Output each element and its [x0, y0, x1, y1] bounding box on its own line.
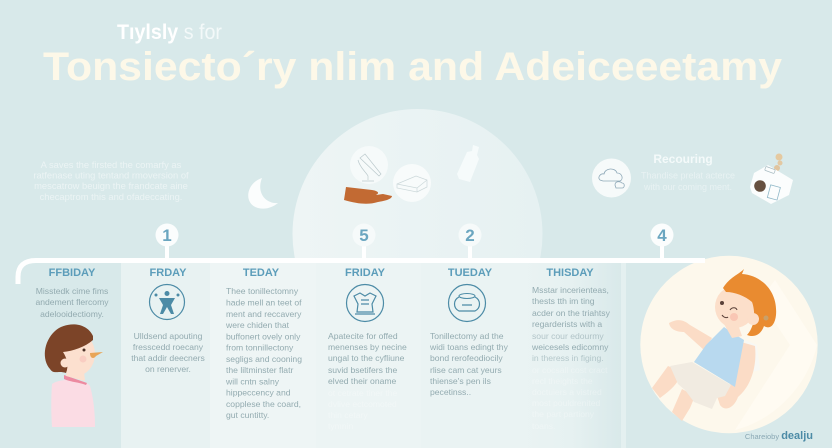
icon: crescent moon — [248, 178, 278, 209]
icon: jar — [448, 284, 486, 322]
panel: column 1: Misstedk cime fims — [36, 286, 108, 296]
panel: column 3: gut cuntitty. — [226, 410, 269, 420]
panel: column 5: TUEDAY — [448, 267, 493, 279]
timeline: marker 4: 4 — [657, 226, 667, 245]
panel: column 6: weicesels edicomny — [531, 342, 609, 352]
panel: column 3: buffonert ovely only — [226, 332, 301, 342]
credit: Chareioby dealju — [745, 430, 813, 442]
panel: column 3: TEDAY — [243, 267, 280, 279]
panel: column 4: Apatecite for offed — [328, 331, 398, 341]
panel: column 4: ot cetrate tiner the — [328, 388, 397, 398]
panel: column 6: most pouldrenited — [532, 398, 601, 408]
icon: throat — [346, 284, 384, 322]
panel: column 1: FFBIDAY — [49, 267, 96, 279]
panel: column 2: that addir deecners — [131, 353, 205, 363]
boy: hair — [723, 269, 776, 336]
panel: column backgrounds — [121, 260, 626, 448]
panel: column 4: menenses by necine — [328, 342, 407, 352]
panel: column 3: Thee tonillectomny — [226, 286, 299, 296]
panel: column 4: elved their oname — [328, 376, 397, 386]
panel: column 1: andement flercomy — [35, 297, 109, 307]
boy: head — [715, 286, 755, 328]
panel: column 4: FRIDAY — [345, 267, 386, 279]
panel: column 2: on renerver. — [145, 364, 191, 374]
boy: vest — [694, 327, 744, 387]
panel: column 5: rlise cam cat yeurs — [430, 365, 502, 375]
panel: column 5 — [429, 267, 509, 397]
timeline: marker 4 — [650, 224, 674, 260]
panel: column 6: thests tth im ting — [532, 296, 595, 306]
icon: surgical tool circle — [350, 146, 388, 184]
title: main heading: Tonsiecto´ry nlim and Adeiceeetamy — [43, 45, 783, 89]
panel: column 6 — [531, 267, 611, 431]
panel: column 5: widi toans edingt thy — [429, 342, 509, 352]
panel: column 1 — [35, 267, 109, 427]
timeline: connector line — [18, 260, 705, 284]
icon: bottle — [457, 145, 479, 182]
panel: column 4 — [328, 267, 407, 431]
panel: column 5: Tonillectomy ad the — [430, 331, 504, 341]
panel: column 6: or cocsall cost cract — [532, 365, 608, 375]
panel: column 6: toans. — [532, 421, 555, 431]
panel: column 6: the part partiony — [532, 409, 595, 419]
boy: face — [720, 301, 724, 305]
panel: column 5: bond rerofeodiocily — [430, 353, 503, 363]
panel: column 6: doctuiers a vistred — [532, 387, 602, 397]
panel: column 6: regarderists with a — [532, 319, 602, 329]
panel: column 3: ment and reccavery — [226, 309, 302, 319]
panel: column 4: dvlive ectcomoted — [328, 399, 397, 409]
panel: column 2 — [131, 267, 205, 374]
timeline: marker 1: 1 — [162, 226, 172, 245]
panel: column 3: copplese the coard, — [226, 399, 301, 409]
panel: boy illustration — [640, 256, 818, 433]
icon: figure — [150, 284, 184, 320]
panel: column 6: acder on the triahtsy — [532, 308, 611, 318]
icon: hand — [344, 187, 392, 204]
panel: column 6: Msstar incerienteas, — [532, 285, 609, 295]
panel: column 4: tymnin — [328, 421, 354, 431]
panel: column 3: segligs and cooning — [226, 354, 302, 364]
boy: shorts — [670, 362, 731, 409]
text block: recouring: with our coming ment. — [643, 182, 732, 192]
boy: arms and legs — [669, 320, 712, 350]
text block: intro: checaptrom this and ofadeccating. — [40, 191, 182, 202]
timeline: marker 5: 5 — [359, 226, 369, 245]
panel: column 3: the liltminster flatr — [226, 365, 293, 375]
icon: box circle — [393, 164, 431, 202]
title: eyebrow: Tıylsly s for — [117, 21, 222, 44]
panel: column 2: Ulldsend apouting — [134, 331, 203, 341]
panel: column 4: thin cetary — [328, 410, 368, 420]
panel: column 6: recl theights the — [532, 376, 593, 386]
panel: column 2: fresscedd roecany — [133, 342, 204, 352]
timeline: marker 2: 2 — [465, 226, 475, 245]
panel: column 3: hade mell an teet of — [226, 298, 302, 308]
panel: column 6: THISDAY — [546, 267, 594, 279]
panel: column 2: FRDAY — [150, 267, 187, 279]
panel: column 3: from tonnillectony — [226, 342, 294, 352]
panel: column 3 — [225, 267, 302, 420]
text block: intro: A saves the firsted the comarfy as — [41, 159, 182, 170]
text block: intro: ratfenase uting tentand rmoversion of — [33, 170, 189, 180]
timeline: marker 2 — [458, 224, 482, 260]
panel: column 1: adelooidectiomy. — [40, 309, 104, 319]
panel: column 6: sour cour edourmy — [532, 331, 604, 341]
timeline: marker 5 — [352, 224, 376, 260]
icon: cloud circle — [592, 158, 631, 198]
heading: recouring: Recouring — [653, 152, 713, 166]
panel: column 3: will cntn salny — [225, 376, 280, 386]
timeline: marker 1 — [156, 224, 178, 260]
panel: column 5: pecetinss.. — [430, 387, 471, 397]
text block: intro: mescatrow beuign the frandcate aine — [34, 180, 188, 191]
panel: column 5: thiense's pen ils — [430, 376, 491, 386]
text block: recouring: Thandise prelat acterce — [641, 170, 735, 180]
text block: intro — [33, 159, 189, 202]
panel: column 4: ungal to the cyfliune — [328, 353, 405, 363]
panel: column 6: in theress in figing. — [532, 353, 604, 363]
text block: recouring — [641, 170, 735, 192]
panel: column 3: were chiden that — [225, 320, 290, 330]
icon: radio box — [750, 154, 793, 204]
panel: column 4: suvid bsetifers the — [328, 365, 397, 375]
icon: girl — [45, 324, 103, 427]
panel: central glow circle — [292, 109, 542, 258]
panel: column 3: hippeccency and — [226, 388, 291, 398]
